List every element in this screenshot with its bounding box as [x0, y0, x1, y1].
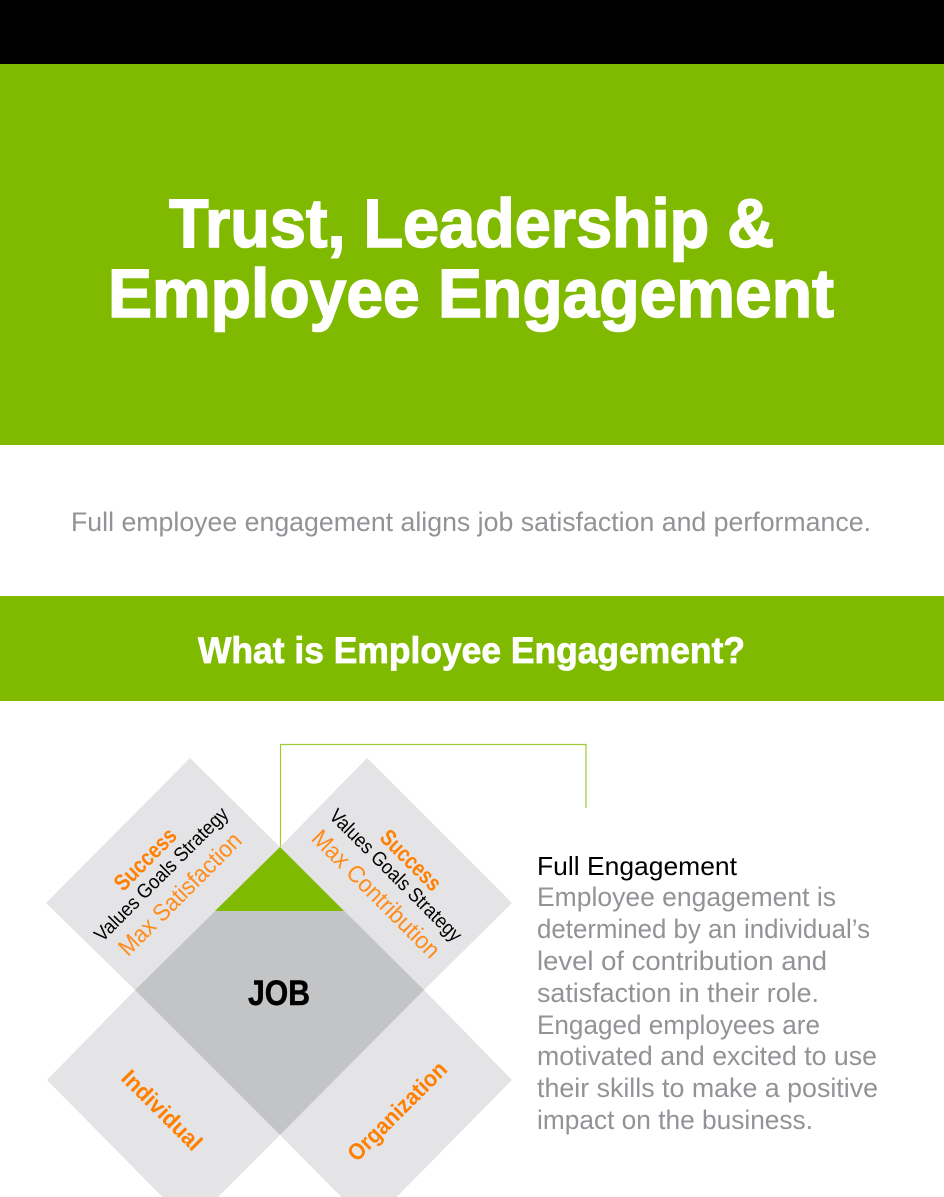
section banner: [0, 596, 944, 701]
top-left labels: Success: [108, 822, 182, 896]
connector line: [280, 744, 586, 847]
label: Individual: Individual: [116, 1064, 208, 1156]
panel: top-right diamond: [280, 758, 512, 990]
top-right labels: Values Goals Strategy: [325, 805, 466, 946]
top-right labels: Success: [375, 824, 447, 896]
description: satisfaction in their role.: [537, 978, 819, 1008]
description: [537, 882, 878, 1135]
description: motivated and excited to use: [537, 1041, 877, 1071]
green triangle: [215, 847, 344, 911]
panel: top-left diamond: [46, 758, 280, 990]
description: Engaged employees are: [537, 1010, 820, 1040]
title: [108, 185, 834, 332]
title: Employee Engagement: [108, 255, 834, 332]
diagram: job engagement diamonds: [46, 758, 512, 1197]
section heading: What is Employee Engagement?: [198, 630, 745, 671]
subtitle: Full employee engagement aligns job satisfaction and performance.: [71, 507, 871, 537]
panel: bottom-left diamond: [47, 990, 280, 1197]
top-left labels: Values Goals Strategy: [90, 803, 233, 946]
top-right labels: Max Contribution: [306, 825, 445, 964]
top-left labels: Max Satisfaction: [113, 827, 248, 962]
label: JOB: JOB: [248, 974, 310, 1013]
top black bar: [0, 0, 944, 64]
title banner: [0, 64, 944, 445]
title: Trust, Leadership &: [169, 185, 774, 262]
label: Organization: Organization: [342, 1056, 452, 1166]
text block: full engagement: [537, 851, 878, 1135]
description: impact on the business.: [537, 1105, 813, 1135]
panel: bottom-right diamond: [280, 990, 512, 1197]
description: level of contribution and: [537, 946, 827, 976]
description: determined by an individual’s: [537, 914, 870, 944]
heading: Full Engagement: Full Engagement: [537, 851, 738, 881]
description: their skills to make a positive: [537, 1073, 878, 1103]
description: Employee engagement is: [537, 882, 836, 912]
panel: centre job diamond: [135, 847, 424, 1135]
